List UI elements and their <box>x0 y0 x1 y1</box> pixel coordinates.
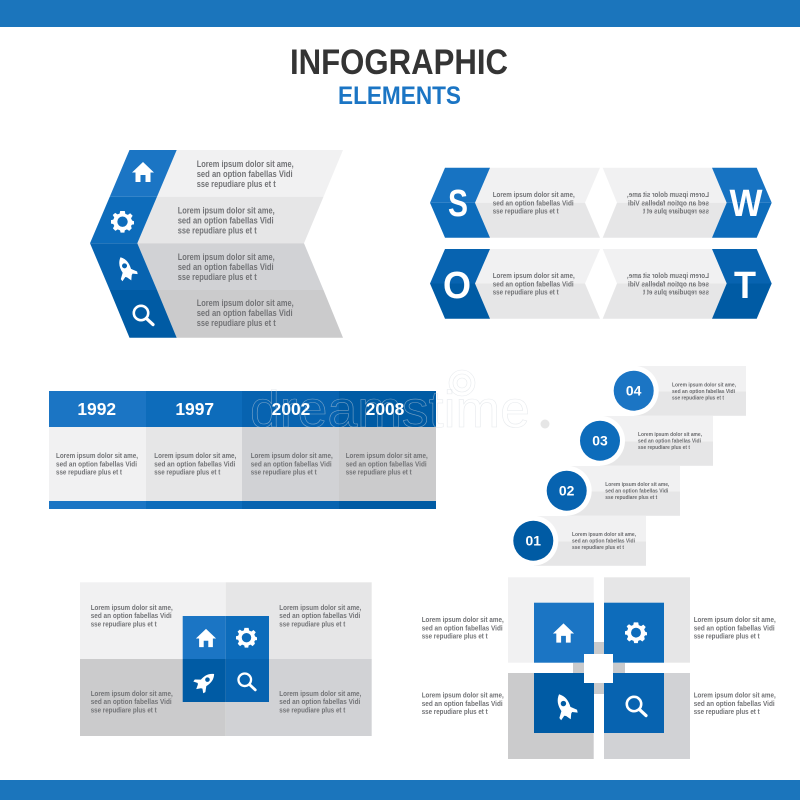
text block: lower left <box>422 690 504 716</box>
timeline 2008: sse repudiare plus et t <box>346 468 412 477</box>
timeline 2008: sed an option fabellas Vidi <box>346 459 427 468</box>
SWOT S: sed an option fabellas Vidi <box>493 198 574 207</box>
text block: bottom left: sed an option fabellas Vidi <box>91 697 172 706</box>
SWOT O: O <box>443 265 471 307</box>
bottom bar <box>0 780 800 800</box>
timeline 1992: 1992 <box>77 399 116 419</box>
timeline 2002: Lorem ipsum dolor sit ame, <box>251 451 333 460</box>
text block: top left: Lorem ipsum dolor sit ame, <box>91 603 173 612</box>
timeline 1997: sse repudiare plus et t <box>154 468 221 477</box>
timeline 2002 <box>242 391 339 509</box>
chevron row 4: Lorem ipsum dolor sit ame, <box>197 298 294 308</box>
text block: lower right: Lorem ipsum dolor sit ame, <box>694 690 776 700</box>
chevron row 2: sse repudiare plus et t <box>178 226 257 236</box>
step 02: sed an option fabellas Vidi <box>605 489 669 495</box>
quadrant home <box>508 577 594 663</box>
title <box>290 43 508 110</box>
text block: lower right: sse repudiare plus et t <box>694 707 760 716</box>
step 03: 03 <box>592 434 608 449</box>
step 01: sed an option fabellas Vidi <box>572 539 635 545</box>
panel: SWOT <box>430 168 772 319</box>
timeline 1992: Lorem ipsum dolor sit ame, <box>56 451 138 460</box>
SWOT O: sed an option fabellas Vidi <box>493 279 574 288</box>
chevron row 3: Lorem ipsum dolor sit ame, <box>178 252 275 262</box>
text block: lower right <box>694 690 776 716</box>
SWOT W: W <box>730 183 763 225</box>
white centre square <box>584 654 613 683</box>
text block: bottom right: sse repudiare plus et t <box>279 705 346 714</box>
quadrant search <box>604 673 690 759</box>
step 01: sse repudiare plus et t <box>572 545 624 551</box>
chevron row 3: sse repudiare plus et t <box>178 272 257 282</box>
text block: top left: sse repudiare plus et t <box>91 619 157 628</box>
chevron row 2: sed an option fabellas Vidi <box>178 216 274 226</box>
chevron row 1: sed an option fabellas Vidi <box>197 169 293 179</box>
text block: upper left: sse repudiare plus et t <box>422 632 488 641</box>
timeline 1997: sed an option fabellas Vidi <box>154 459 235 468</box>
chevron row 1 <box>110 150 343 197</box>
SWOT T: Lorem ipsum dolor sit ame, <box>627 271 709 280</box>
quadrant rocket <box>508 673 594 759</box>
step 04: sse repudiare plus et t <box>672 396 724 402</box>
chevron row 3: sed an option fabellas Vidi <box>178 262 274 272</box>
step 03 <box>575 416 713 466</box>
step 03: sed an option fabellas Vidi <box>638 438 701 444</box>
chevron row 1: sse repudiare plus et t <box>197 179 276 189</box>
grey cross behind centre <box>573 642 625 694</box>
chevron row 3 <box>90 243 324 290</box>
SWOT T <box>603 249 772 319</box>
chevron row 4: sse repudiare plus et t <box>197 318 276 328</box>
panel: icon grid with four text quadrants <box>80 582 372 736</box>
text block: upper right: sed an option fabellas Vidi <box>694 623 775 632</box>
text block: lower left: Lorem ipsum dolor sit ame, <box>422 690 504 700</box>
step 04: 04 <box>626 384 642 399</box>
text block: bottom left <box>91 689 173 714</box>
timeline 2008: 2008 <box>366 399 405 419</box>
step 01 <box>508 516 646 566</box>
text block: bottom right: Lorem ipsum dolor sit ame, <box>279 689 361 698</box>
text block: upper left: sed an option fabellas Vidi <box>422 623 503 632</box>
step 03: Lorem ipsum dolor sit ame, <box>638 432 702 438</box>
text block: lower left: sed an option fabellas Vidi <box>422 699 503 708</box>
blue icon tile: search <box>226 659 269 702</box>
step 02: Lorem ipsum dolor sit ame, <box>605 482 670 488</box>
SWOT S <box>430 168 600 238</box>
text block: upper right <box>694 615 776 641</box>
blue icon tile: home <box>183 616 226 659</box>
quadrant gear <box>604 577 690 663</box>
text block: upper right: Lorem ipsum dolor sit ame, <box>694 615 776 624</box>
panel: timeline <box>49 391 436 509</box>
SWOT W: Lorem ipsum dolor sit ame, <box>627 190 709 199</box>
timeline 1992: sed an option fabellas Vidi <box>56 459 137 468</box>
step 01: Lorem ipsum dolor sit ame, <box>572 532 636 538</box>
SWOT O <box>430 249 600 319</box>
SWOT S: sse repudiare plus et t <box>493 207 559 216</box>
timeline 2002: 2002 <box>272 399 311 419</box>
step 02: sse repudiare plus et t <box>605 495 657 501</box>
chevron row 2: Lorem ipsum dolor sit ame, <box>178 206 275 216</box>
timeline 2008: Lorem ipsum dolor sit ame, <box>346 451 428 460</box>
panel: numbered steps <box>508 366 746 566</box>
text block: top right <box>279 603 361 628</box>
SWOT O: Lorem ipsum dolor sit ame, <box>493 271 575 280</box>
timeline 1997 <box>146 391 242 509</box>
step 04: Lorem ipsum dolor sit ame, <box>672 382 736 388</box>
title: ELEMENTS <box>338 82 461 110</box>
step 01: 01 <box>526 534 542 549</box>
SWOT W <box>603 168 772 238</box>
text block: top left <box>91 603 173 628</box>
SWOT O: sse repudiare plus et t <box>493 288 559 297</box>
text block: top right: sse repudiare plus et t <box>279 619 346 628</box>
text block: upper left: Lorem ipsum dolor sit ame, <box>422 615 504 624</box>
chevron row 4: sed an option fabellas Vidi <box>197 308 293 318</box>
SWOT T: T <box>734 265 756 307</box>
timeline 1992: sse repudiare plus et t <box>56 468 122 477</box>
SWOT W: sed an option fabellas Vidi <box>628 198 709 207</box>
text block: bottom left: Lorem ipsum dolor sit ame, <box>91 689 173 698</box>
text block: lower left: sse repudiare plus et t <box>422 707 488 716</box>
SWOT W: sse repudiare plus et t <box>643 207 709 216</box>
timeline 1997: 1997 <box>175 399 214 419</box>
text block: bottom left: sse repudiare plus et t <box>91 705 157 714</box>
step 04 <box>609 366 746 416</box>
timeline 1997: Lorem ipsum dolor sit ame, <box>154 451 236 460</box>
timeline 2002: sed an option fabellas Vidi <box>251 459 332 468</box>
quadrant backgrounds <box>80 582 372 736</box>
step 02: 02 <box>559 484 574 499</box>
blue icon tile: rocket <box>183 659 226 702</box>
text block: upper left <box>422 615 504 641</box>
chevron row 4 <box>110 290 343 338</box>
timeline 2002: sse repudiare plus et t <box>251 468 317 477</box>
timeline 2008 <box>339 391 436 509</box>
text block: top right: Lorem ipsum dolor sit ame, <box>279 603 361 612</box>
SWOT T: sse repudiare plus et t <box>643 288 709 297</box>
text block: top left: sed an option fabellas Vidi <box>91 611 172 620</box>
text block: bottom right <box>279 689 361 714</box>
SWOT S: Lorem ipsum dolor sit ame, <box>493 190 575 199</box>
panel: chevron list <box>90 150 343 338</box>
text block: bottom right: sed an option fabellas Vidi <box>279 697 360 706</box>
SWOT T: sed an option fabellas Vidi <box>628 279 709 288</box>
SWOT S: S <box>448 183 468 225</box>
blue icon tile: gear <box>226 616 269 659</box>
step 02 <box>542 466 680 516</box>
watermark: dreamstime <box>250 381 530 439</box>
step 04: sed an option fabellas Vidi <box>672 389 735 395</box>
chevron row 2 <box>90 197 324 243</box>
text block: lower right: sed an option fabellas Vidi <box>694 699 775 708</box>
text block: top right: sed an option fabellas Vidi <box>279 611 360 620</box>
panel: cross quadrant diagram <box>422 577 776 759</box>
top bar <box>0 0 800 27</box>
step 03: sse repudiare plus et t <box>638 445 690 451</box>
timeline 1992 <box>49 391 146 509</box>
title: INFOGRAPHIC <box>290 43 508 82</box>
chevron row 1: Lorem ipsum dolor sit ame, <box>197 159 294 169</box>
text block: upper right: sse repudiare plus et t <box>694 632 760 641</box>
